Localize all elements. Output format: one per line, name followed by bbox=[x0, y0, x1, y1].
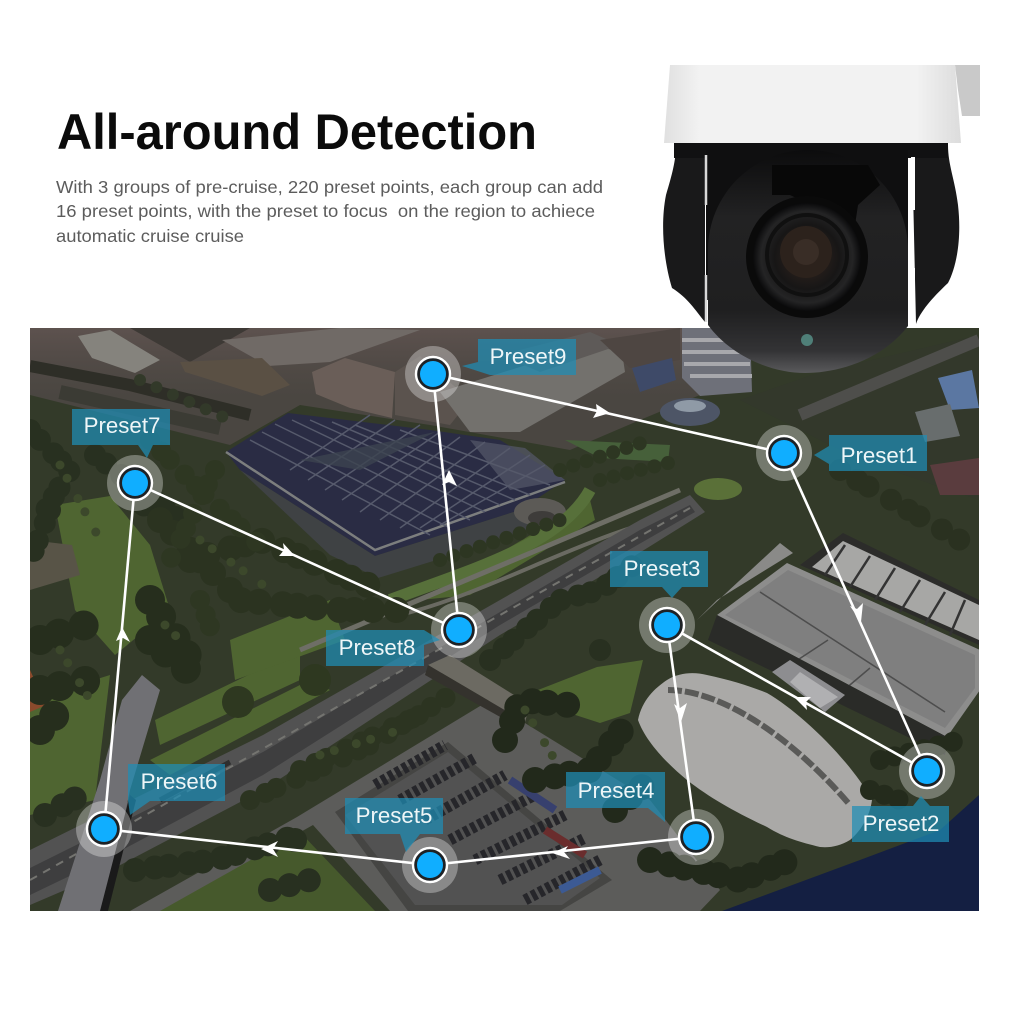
top right city bbox=[565, 335, 979, 540]
striped tower and rotunda bbox=[660, 328, 752, 426]
route lines bbox=[104, 374, 927, 865]
camera body top bbox=[674, 143, 948, 158]
preset labels: Preset2 bbox=[863, 811, 939, 836]
preset labels: Preset7 bbox=[84, 413, 160, 438]
ball reflection bbox=[772, 165, 880, 225]
preset labels: Preset9 bbox=[490, 344, 566, 369]
industrial district bbox=[30, 328, 730, 450]
title: All-around Detection bbox=[57, 104, 537, 160]
preset labels: Preset3 bbox=[624, 556, 700, 581]
right exhibition hall bbox=[697, 533, 980, 755]
mounting bracket bbox=[955, 65, 980, 116]
description text: automatic cruise cruise bbox=[56, 226, 244, 246]
PTZ camera bbox=[663, 65, 980, 373]
lens bbox=[746, 196, 868, 318]
description text bbox=[56, 177, 603, 246]
white dome bbox=[664, 65, 961, 143]
description text: 16 preset points, with the preset to focus on the region to achiece bbox=[56, 201, 595, 221]
preset labels: Preset6 bbox=[141, 769, 217, 794]
preset nodes bbox=[76, 346, 955, 893]
route arrowheads bbox=[116, 404, 863, 859]
white stadium roof bbox=[638, 673, 872, 847]
right housing wing bbox=[912, 145, 959, 324]
left housing wing bbox=[663, 145, 705, 322]
main highway bbox=[30, 490, 705, 905]
side road and car park bbox=[130, 700, 720, 911]
park lawns bbox=[30, 496, 643, 911]
preset labels: Preset4 bbox=[578, 778, 654, 803]
preset labels bbox=[72, 339, 949, 852]
aerial city map bbox=[30, 328, 980, 911]
tree clusters bbox=[30, 380, 960, 890]
preset labels: Preset1 bbox=[841, 443, 917, 468]
preset labels: Preset8 bbox=[339, 635, 415, 660]
solar pavilion bbox=[226, 413, 566, 578]
preset labels: Preset5 bbox=[356, 803, 432, 828]
bare ground patch bbox=[30, 540, 80, 590]
lens ball bbox=[708, 150, 908, 373]
navy foreground corner bbox=[722, 795, 979, 911]
description text: With 3 groups of pre-cruise, 220 preset points, each group can add bbox=[56, 177, 603, 197]
overpass bbox=[58, 655, 530, 911]
status LED bbox=[801, 334, 813, 346]
green strip and ring road by pavilion bbox=[390, 490, 590, 600]
white gaps bbox=[705, 155, 707, 322]
